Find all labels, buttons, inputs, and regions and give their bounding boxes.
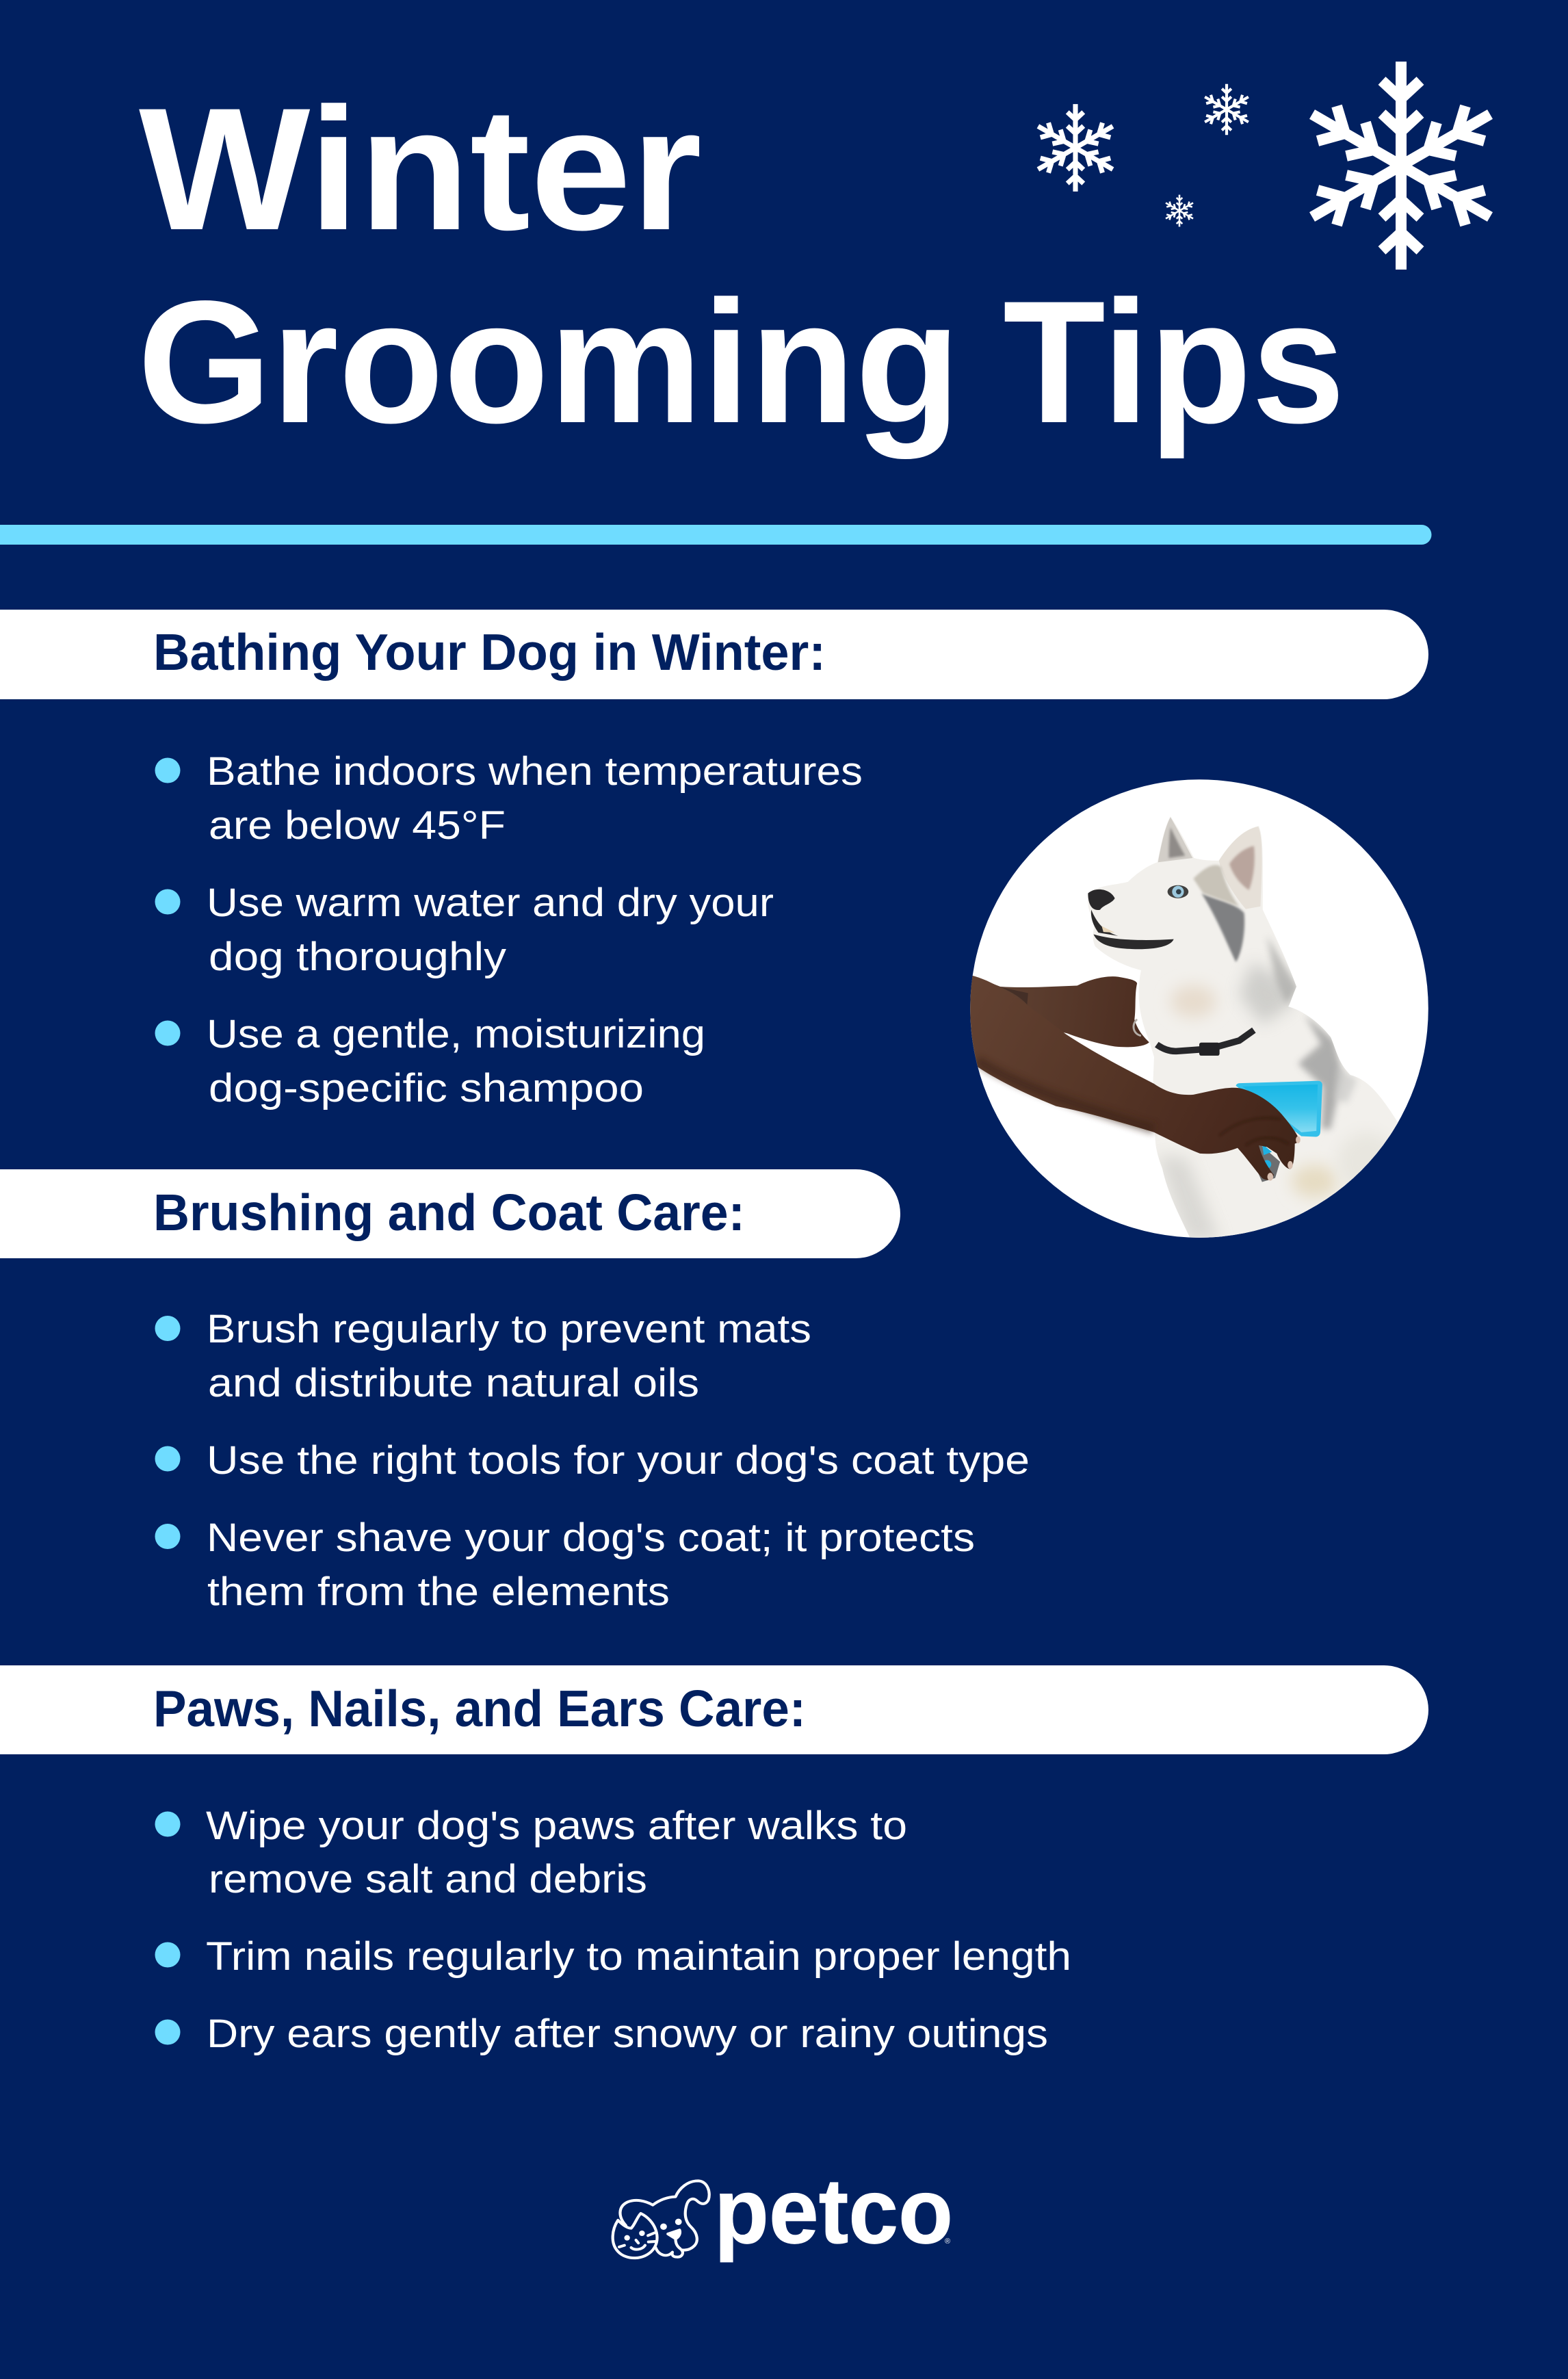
section: brushing	[0, 1169, 1030, 1614]
face mask markings	[1193, 865, 1244, 962]
collar	[1157, 1030, 1254, 1056]
bullet list: bathing: Use warm water and dry your	[207, 881, 774, 925]
bullet list: brushing: Use the right tools for your dog's coat type	[207, 1438, 1030, 1483]
ears	[1158, 817, 1262, 909]
bullet list: bathing	[155, 749, 863, 1110]
bullet list: brushing: them from the elements	[207, 1570, 670, 1614]
bullet list: bathing: dog thoroughly	[209, 935, 506, 979]
heading pill: brushing: Brushing and Coat Care:	[153, 1184, 745, 1241]
icon: snowflake tiny	[1166, 195, 1193, 226]
logo: petco	[613, 2159, 953, 2263]
bullet list: brushing: Brush regularly to prevent mats	[207, 1307, 811, 1351]
bullet list: brushing	[155, 1307, 1030, 1614]
bullet list: bathing: Use a gentle, moisturizing	[207, 1012, 705, 1056]
bullet list: paws: Wipe your dog's paws after walks to	[206, 1804, 907, 1848]
icon: cat and dog line art	[613, 2181, 709, 2258]
nose	[1088, 889, 1115, 910]
photo: husky being brushed	[970, 779, 1428, 1238]
title: Grooming	[138, 265, 961, 460]
wordmark: petco	[714, 2159, 953, 2263]
bullet list: paws: Trim nails regularly to maintain proper length	[206, 1934, 1071, 1979]
section: paws	[0, 1665, 1428, 2056]
bullet list: bathing: dog-specific shampoo	[209, 1066, 644, 1110]
bullet list: bathing: are below 45°F	[209, 803, 506, 848]
eye	[1168, 885, 1188, 898]
heading pill: paws: Paws, Nails, and Ears Care:	[153, 1680, 806, 1737]
upper hand and forearm	[971, 975, 1149, 1047]
fur shading	[1158, 936, 1396, 1240]
ring	[1134, 1019, 1141, 1036]
bullet list: brushing: and distribute natural oils	[208, 1361, 699, 1405]
bullet list: paws: Dry ears gently after snowy or rainy outings	[207, 2012, 1048, 2056]
heading pill: brushing	[0, 1169, 900, 1258]
lower arm and brushing hand	[970, 976, 1300, 1180]
arm shading	[978, 987, 1288, 1145]
title: Tips	[1003, 265, 1345, 460]
heading pill: bathing	[0, 610, 1428, 699]
bullet list: bathing: Bathe indoors when temperatures	[207, 749, 863, 794]
bullet list: brushing: Never shave your dog's coat; it protects	[207, 1516, 975, 1560]
title divider bar	[0, 525, 1431, 545]
title: Winter	[139, 72, 702, 267]
icon: snowflake large	[1312, 62, 1490, 270]
section: bathing	[0, 610, 1428, 1110]
icon: snowflake medium	[1038, 104, 1113, 192]
bullet list: paws: remove salt and debris	[209, 1857, 647, 1901]
heading pill: paws	[0, 1665, 1428, 1754]
icon: snowflake small top	[1205, 84, 1249, 135]
title	[138, 72, 1345, 460]
mouth	[1091, 910, 1174, 949]
dog silhouette	[1088, 817, 1398, 1238]
fingernails	[1267, 1136, 1301, 1181]
bullet list: paws	[155, 1804, 1071, 2056]
brush	[1236, 1081, 1322, 1182]
registered mark: ®	[945, 2237, 950, 2246]
heading pill: bathing: Bathing Your Dog in Winter:	[153, 623, 826, 681]
